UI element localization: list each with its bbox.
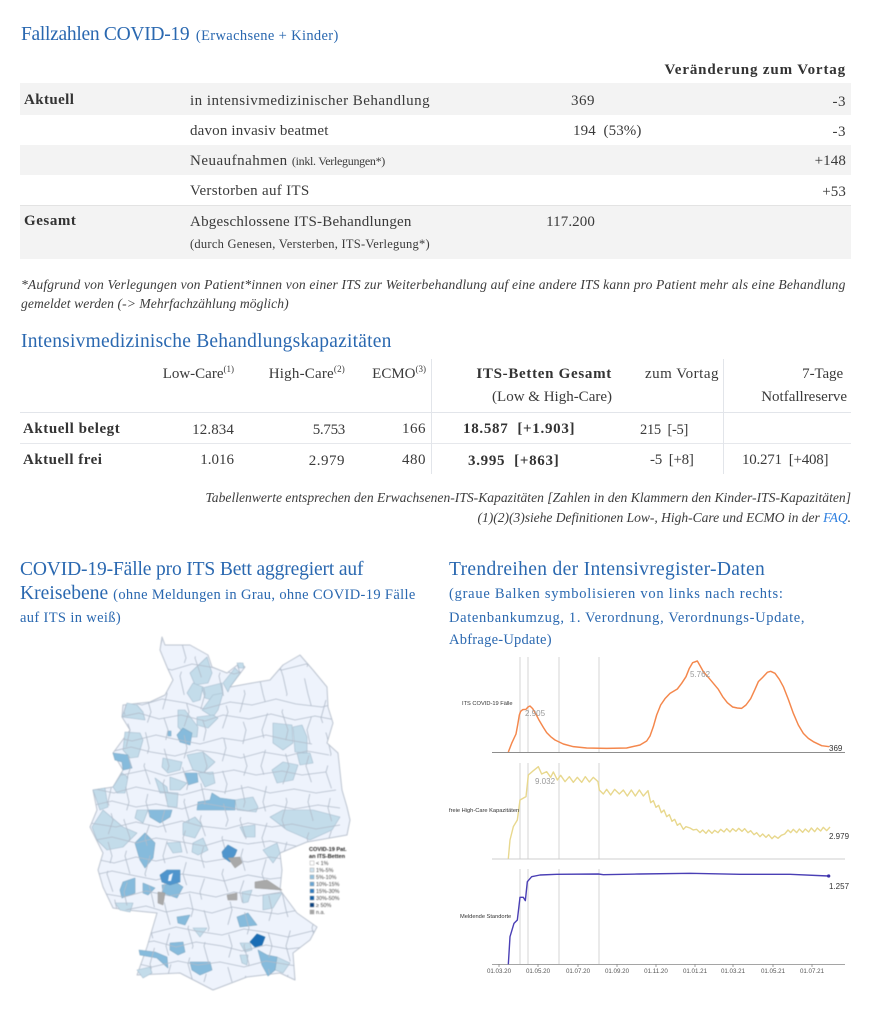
column header: ITS-Betten Gesamt: ITS-Betten Gesamt [476, 366, 612, 382]
legend entries: ≥ 50% [316, 903, 331, 909]
light districts (1–5%) [92, 657, 340, 978]
axis labels: 01.07.21 [800, 968, 825, 975]
axis labels: 01.11.20 [644, 968, 668, 975]
value: 2.979: 2.979 [309, 453, 345, 469]
series labels [449, 701, 519, 920]
heading: trend series: Trendreihen der Intensivregister-Daten [449, 559, 765, 580]
peak values: 5.762 [690, 670, 711, 679]
legend title line 2: an ITS-Betten [309, 854, 346, 860]
peak values [525, 670, 711, 786]
value: -5 [+8]: -5 [+8] [650, 452, 694, 468]
panel: case numbers table [20, 62, 851, 259]
legend entries: n.a. [316, 910, 325, 916]
axis ticks [499, 964, 812, 967]
column divider 2 [723, 359, 724, 474]
row label: Aktuell belegt: Aktuell belegt [23, 421, 120, 437]
line: freie High-Care Kapazitäten [508, 767, 830, 859]
column header: 7-Tage: 7-Tage [802, 366, 843, 382]
legend entries: < 1% [316, 861, 329, 867]
table rule middle [20, 443, 851, 444]
axis labels: 01.03.20 [487, 968, 512, 975]
peak values: 2.905 [525, 709, 546, 718]
footnote: Verlegungen: gemeldet werden (-> Mehrfachzählung möglich) [21, 296, 289, 311]
highest district (30–50%) [250, 934, 265, 947]
value: 166: 166 [402, 421, 426, 437]
axis labels: 01.01.21 [683, 968, 708, 975]
series labels: ITS COVID-19 Fälle [462, 701, 513, 707]
legend entries: 10%-15% [316, 882, 340, 888]
end values [829, 744, 850, 891]
value: 1.016: 1.016 [200, 452, 234, 468]
column header: zum Vortag: zum Vortag [645, 366, 719, 382]
heading: trend series [449, 559, 805, 648]
axis labels [487, 968, 825, 975]
column divider 1 [431, 359, 432, 474]
line: Meldende Standorte [508, 873, 830, 964]
legend entries [310, 861, 340, 916]
row background 5 [20, 205, 851, 259]
charts: trend series [449, 657, 850, 975]
map: Germany districts [89, 636, 351, 991]
end values: 2.979 [829, 832, 850, 841]
axis labels: 01.07.20 [566, 968, 591, 975]
legend title: COVID-19 Pat. [309, 847, 347, 853]
footnote: Verlegungen: *Aufgrund von Verlegungen von Patient*innen von einer ITS zur Weiterbehandlung auf eine andere ITS kann pro Patient mehr als eine Behandlung [21, 277, 846, 292]
axis labels: 01.05.21 [761, 968, 786, 975]
table rule top [20, 412, 851, 413]
column header: High-Care: High-Care(2) [269, 364, 345, 382]
row background 1 [20, 83, 851, 115]
footnote: Verlegungen [21, 277, 846, 311]
row label: Aktuell: Aktuell [24, 92, 74, 108]
heading: trend series: (graue Balken symbolisieren von links nach rechts: [449, 586, 784, 602]
row note: durch Genesen: (durch Genesen, Versterben, ITS-Verlegung*) [190, 237, 430, 251]
column header: ECMO: ECMO(3) [372, 364, 426, 382]
districts without data (grey) [158, 857, 282, 905]
change: +53: +53 [822, 184, 846, 200]
value: 3.995 [+863]: 3.995 [+863] [468, 453, 559, 469]
value: 12.834: 12.834 [192, 422, 234, 438]
column subheader: Low & High-Care: (Low & High-Care) [492, 389, 612, 405]
heading: map [20, 559, 416, 626]
value: 194 (53%): 194 (53%) [573, 123, 642, 139]
value: 117.200: 117.200 [546, 214, 595, 230]
value: 5.753: 5.753 [313, 422, 345, 438]
value: 18.587 [+1.903]: 18.587 [+1.903] [463, 421, 575, 437]
map silhouette [90, 637, 350, 990]
series labels: Meldende Standorte [460, 914, 511, 920]
change: -3: -3 [832, 124, 846, 140]
axis labels: 01.05.20 [526, 968, 551, 975]
heading: trend series: Datenbankumzug, 1. Verordnung, Verordnungs-Update, [449, 610, 805, 626]
row text: Abgeschlossene ITS-Behandlungen: Abgeschlossene ITS-Behandlungen [190, 214, 412, 230]
panel: capacity table [20, 359, 851, 474]
value: 480: 480 [402, 452, 426, 468]
table note [206, 490, 851, 525]
district boundaries [90, 640, 346, 982]
row text: Verstorben auf ITS: Verstorben auf ITS [190, 183, 310, 199]
value: 215 [-5]: 215 [-5] [640, 422, 688, 438]
change: -3: -3 [832, 94, 846, 110]
row label: Aktuell frei: Aktuell frei [23, 452, 102, 468]
peak values: 9.032 [535, 777, 556, 786]
medium districts (5–15%) [113, 728, 277, 976]
value: 369: 369 [571, 93, 595, 109]
row text: in intensivmedizinischer Behandlung: in intensivmedizinischer Behandlung [190, 93, 430, 109]
row text: Neuaufnahmen: Neuaufnahmen (inkl. Verlegungen*) [190, 153, 385, 169]
heading: map: Kreisebene (ohne Meldungen in Grau, ohne COVID-19 Fälle [20, 583, 416, 604]
series labels: freie High-Care Kapazitäten [449, 808, 519, 814]
axis labels: 01.09.20 [605, 968, 630, 975]
legend entries: 30%-50% [316, 896, 340, 902]
legend entries: 1%-5% [316, 868, 334, 874]
legend entries: 15%-30% [316, 889, 340, 895]
table note: Tabellenwerte entsprechen den Erwachsenen-ITS-Kapazitäten [Zahlen in den Klammern den Kinder-ITS-Kapazitäten] [206, 490, 851, 505]
row label: Gesamt: Gesamt [24, 213, 76, 229]
column subheader: Notfallreserve: Notfallreserve [761, 389, 847, 405]
row background 3 [20, 145, 851, 175]
table note: (1)(2)(3)siehe Definitionen Low-, High-Care und ECMO in der FAQ. [478, 510, 851, 525]
line: ITS COVID-19 Fälle [508, 661, 829, 752]
column header: Low-Care: Low-Care(1) [163, 364, 234, 382]
value: 10.271 [+408]: 10.271 [+408] [742, 452, 828, 468]
white spot in Frankfurt cluster [168, 873, 173, 881]
change: +148: +148 [815, 153, 846, 169]
heading: map: auf ITS in weiß) [20, 610, 121, 626]
end values: 1.257 [829, 882, 850, 891]
chart axes [492, 752, 845, 964]
column header: Veränderung zum Vortag: Veränderung zum Vortag [664, 62, 846, 78]
grey event bars [520, 657, 599, 964]
axis labels: 01.03.21 [721, 968, 746, 975]
strong districts (15–30%) [160, 845, 237, 885]
heading: map: COVID-19-Fälle pro ITS Bett aggregiert auf [20, 559, 363, 580]
heading: Fallzahlen COVID-19: Fallzahlen COVID-19 (Erwachsene + Kinder) [21, 24, 339, 45]
legend entries: 5%-10% [316, 875, 337, 881]
heading: trend series: Abfrage-Update) [449, 632, 552, 648]
heading: Intensivmedizinische Behandlungskapazitäten: Intensivmedizinische Behandlungskapazitäten [21, 331, 392, 352]
row text: davon invasiv beatmet: davon invasiv beatmet [190, 123, 329, 139]
end values: 369 [829, 744, 843, 753]
map legend [309, 847, 347, 916]
